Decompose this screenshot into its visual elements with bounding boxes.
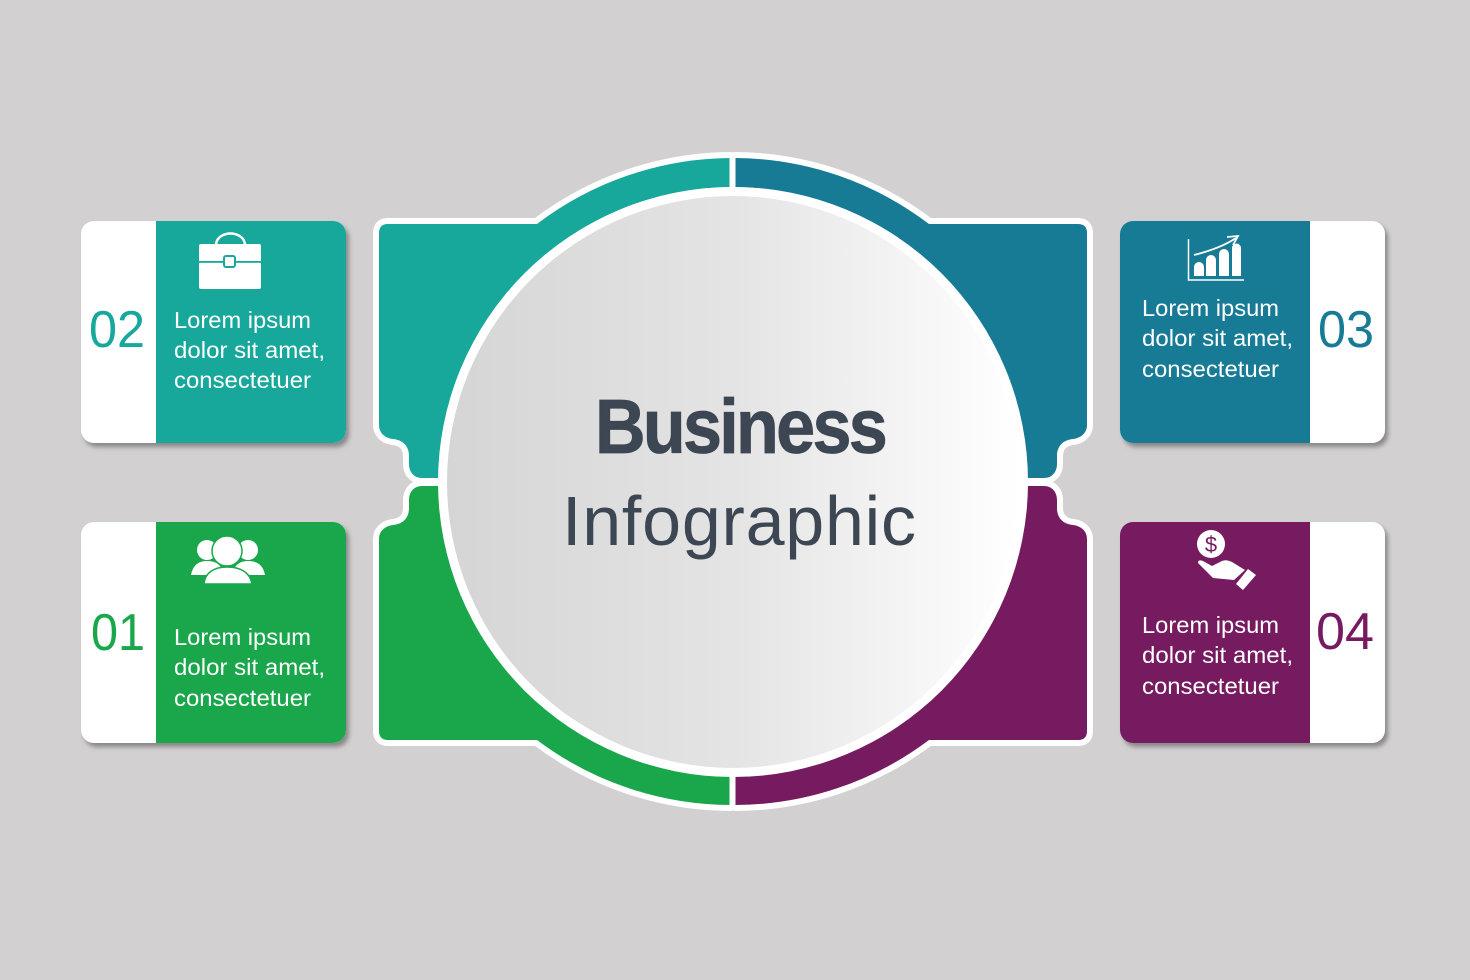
- segment: teal top-left: [379, 158, 730, 478]
- text block: [174, 307, 325, 393]
- icon: bar chart: [1188, 236, 1244, 280]
- text block: Lorem ipsum: [1142, 612, 1279, 638]
- text block: consectetuer: [1142, 356, 1279, 382]
- number 01: 01: [91, 604, 145, 662]
- text block: Lorem ipsum: [1142, 295, 1279, 321]
- icon: hand with coin: $: [1205, 532, 1217, 557]
- text block: dolor sit amet,: [174, 654, 325, 680]
- segment: blue top-right: [736, 158, 1087, 478]
- central diagram: [379, 158, 1087, 805]
- card 03: [1120, 221, 1385, 443]
- text block: [1142, 295, 1293, 382]
- text block: dolor sit amet,: [174, 337, 325, 363]
- text block: consectetuer: [174, 685, 311, 711]
- card 01: [81, 522, 346, 743]
- text block: dolor sit amet,: [1142, 325, 1293, 351]
- title: Business: [595, 384, 885, 470]
- text block: [174, 624, 325, 711]
- title: Infographic: [562, 482, 916, 560]
- text block: Lorem ipsum: [174, 307, 311, 333]
- icon: briefcase: [199, 234, 261, 289]
- card 02: [81, 221, 346, 443]
- number 04: 04: [1316, 603, 1374, 661]
- text block: consectetuer: [174, 367, 311, 393]
- text block: consectetuer: [1142, 673, 1279, 699]
- number 02: 02: [89, 301, 145, 359]
- centre disc: [438, 187, 1028, 777]
- text block: Lorem ipsum: [174, 624, 311, 650]
- text block: dolor sit amet,: [1142, 642, 1293, 668]
- icon: hand with coin: [1197, 530, 1256, 590]
- card 04: [1120, 522, 1385, 743]
- title: [562, 384, 916, 560]
- text block: [1142, 612, 1293, 699]
- icon: people: [191, 536, 265, 584]
- segment: green bottom-left: [379, 486, 730, 805]
- segment: purple bottom-right: [736, 486, 1087, 805]
- number 03: 03: [1318, 301, 1374, 359]
